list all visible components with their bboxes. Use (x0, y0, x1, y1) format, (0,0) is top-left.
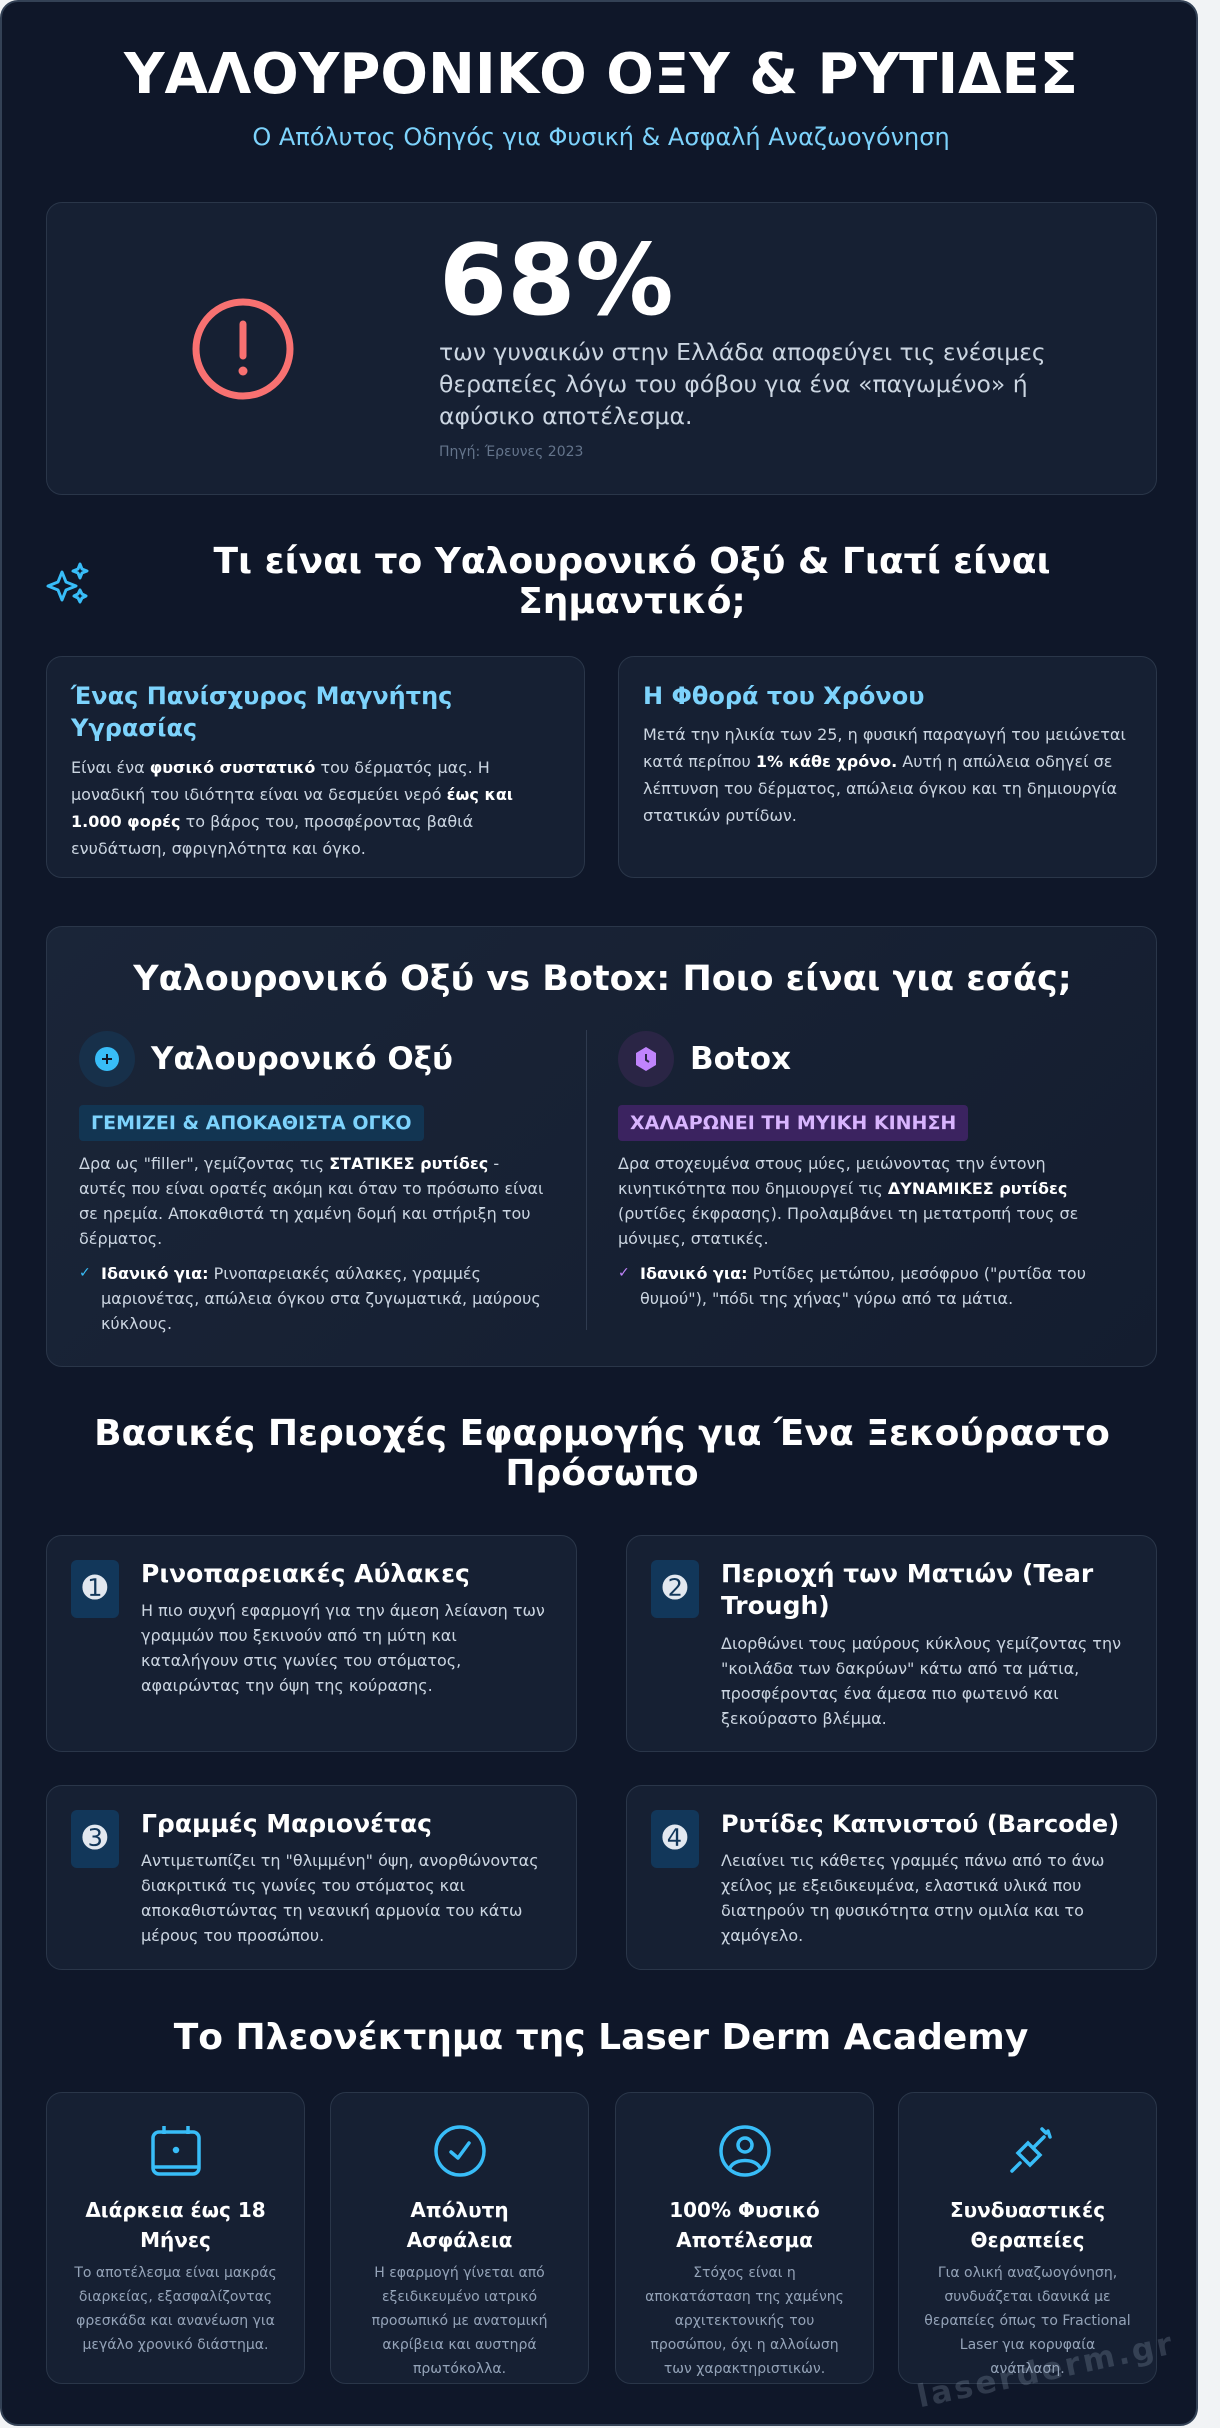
number badge (651, 1810, 699, 1868)
source: Πηγή: Έρευνες 2023 (439, 444, 583, 460)
area body: Αντιμετωπίζει τη "θλιμμένη" όψη, ανορθώνοντας διακριτικά τις γωνίες του στόματος και αποκαθιστώντας τη νεανική αρμονία του κάτω μέρους του προσώπου. (141, 1851, 539, 1945)
divider (586, 1030, 587, 1330)
area card 3 (46, 1785, 577, 1970)
column: HA (79, 1031, 543, 1333)
feature: natural (615, 2092, 874, 2384)
feature title: Θεραπείες (971, 2228, 1084, 2252)
comparison heading: Υαλουρονικό Οξύ vs Botox: Ποιο είναι για εσάς; (133, 959, 1072, 999)
feature title (669, 2198, 820, 2252)
area title: Γραμμές Μαριονέτας (141, 1809, 432, 1838)
card body: Μετά την ηλικία των 25, η φυσική παραγωγή του μειώνεται κατά περίπου 1% κάθε χρόνο. Αυτή η απώλεια οδηγεί σε λέπτυνση του δέρματος, απώλεια όγκου και τη δημιουργία στατικών ρυτίδων. (643, 725, 1126, 825)
feature: combined (898, 2092, 1157, 2384)
column: Botox (618, 1031, 1086, 1308)
tag (79, 1105, 424, 1141)
tag (618, 1105, 968, 1141)
feature title: Διάρκεια έως 18 Μήνες (85, 2198, 266, 2252)
area body: Λειαίνει τις κάθετες γραμμές πάνω από το άνω χείλος με εξειδικευμένα, ελαστικά υλικά που διατηρούν τη φυσικότητα στην ομιλία και το χαμόγελο. (721, 1851, 1104, 1945)
title: ΥΑΛΟΥΡΟΝΙΚΟ ΟΞΥ & ΡΥΤΙΔΕΣ (124, 42, 1078, 107)
number badge: ➊ (82, 1571, 108, 1606)
icon: calendar (151, 2126, 201, 2176)
area body: Η πιο συχνή εφαρμογή για την άμεση λείανση των γραμμών που ξεκινούν από τη μύτη και καταλήγουν στις γωνίες του στόματος, αφαιρώντας την όψη της κούρασης. (141, 1601, 545, 1695)
area card 1 (46, 1535, 577, 1752)
heading: what is HA: Τι είναι το Υαλουρονικό Οξύ & Γιατί είναι Σημαντικό; (214, 541, 1050, 622)
stat text: των γυναικών στην Ελλάδα αποφεύγει τις ενέσιμες θεραπείες λόγω του φόβου για ένα «παγωμένο» ή αφύσικο αποτέλεσμα. (439, 338, 1046, 430)
card title: Ένας Πανίσχυρος Μαγνήτης Υγρασίας (71, 682, 452, 742)
number badge: ➋ (662, 1571, 688, 1606)
area body: Διορθώνει τους μαύρους κύκλους γεμίζοντας την "κοιλάδα των δακρύων" κάτω από τα μάτια, προσφέροντας ένα άμεσα πιο φωτεινό και ξεκούραστο βλέμμα. (721, 1634, 1121, 1728)
number badge: ➌ (82, 1821, 108, 1856)
feature: duration (46, 2092, 305, 2384)
ideal for: ✓ (79, 1265, 91, 1281)
area title: Ρινοπαρειακές Αύλακες (141, 1559, 470, 1588)
feature title: Ασφάλεια (407, 2228, 512, 2252)
feature title (950, 2198, 1105, 2252)
number badge (651, 1560, 699, 1618)
number badge (71, 1810, 119, 1868)
icon: sparkles (46, 562, 88, 604)
area card 2 (626, 1535, 1157, 1752)
feature body: Το αποτέλεσμα είναι μακράς διαρκείας, εξασφαλίζοντας φρεσκάδα και ανανέωση για μεγάλο χρονικό διάστημα. (74, 2265, 277, 2353)
subtitle: Ο Απόλυτος Οδηγός για Φυσική & Ασφαλή Αναζωογόνηση (252, 123, 950, 151)
watermark: laserderm.gr (914, 2325, 1178, 2415)
feature title: 100% Φυσικό (669, 2198, 820, 2222)
stat number: 68% (439, 224, 674, 338)
ideal for: Ιδανικό για: Ρινοπαρειακές αύλακες, γραμμές μαριονέτας, απώλεια όγκου στα ζυγωματικά, μαύρους κύκλους. (101, 1264, 541, 1333)
feature title: Συνδυαστικές (950, 2198, 1105, 2222)
feature title: Απόλυτη (410, 2198, 509, 2222)
tag: ΓΕΜΙΖΕΙ & ΑΠΟΚΑΘΙΣΤΑ ΟΓΚΟ (91, 1112, 412, 1134)
icon: plus (79, 1031, 135, 1087)
column title: Botox (690, 1041, 791, 1077)
area card 4 (626, 1785, 1157, 1970)
icon: botox (618, 1031, 674, 1087)
icon: alert (192, 298, 294, 400)
icon: syringe (1010, 2127, 1052, 2173)
panel: HA vs Botox (46, 926, 1157, 1367)
description: Δρα στοχευμένα στους μύες, μειώνοντας την έντονη κινητικότητα που δημιουργεί τις ΔΥΝΑΜΙΚΕΣ ρυτίδες (ρυτίδες έκφρασης). Προλαμβάνει τη μετατροπή τους σε μόνιμες, στατικές. (618, 1154, 1078, 1248)
heading: advantage: Το Πλεονέκτημα της Laser Derm Academy (174, 2017, 1028, 2058)
number badge (71, 1560, 119, 1618)
icon: check circle (434, 2125, 486, 2177)
panel: time (618, 656, 1157, 878)
ideal for: ✓ (618, 1265, 630, 1281)
description: Δρα ως "filler", γεμίζοντας τις ΣΤΑΤΙΚΕΣ ρυτίδες - αυτές που είναι ορατές ακόμη και όταν το πρόσωπο είναι σε ηρεμία. Αποκαθιστά τη χαμένη δομή και στήριξη του δέρματος. (79, 1154, 543, 1248)
feature body: Στόχος είναι η αποκατάσταση της χαμένης αρχιτεκτονικής του προσώπου, όχι η αλλοίωση των χαρακτηριστικών. (645, 2265, 844, 2377)
tag: ΧΑΛΑΡΩΝΕΙ ΤΗ ΜΥΙΚΗ ΚΙΝΗΣΗ (630, 1112, 956, 1134)
feature title: Αποτέλεσμα (676, 2228, 813, 2252)
feature body: Η εφαρμογή γίνεται από εξειδικευμένο ιατρικό προσωπικό με ανατομική ακρίβεια και αυστηρά πρωτόκολλα. (372, 2265, 547, 2377)
panel: stat (46, 202, 1157, 495)
area title: Περιοχή των Ματιών (Tear Trough) (721, 1559, 1093, 1620)
feature title (406, 2198, 512, 2252)
heading: areas: Βασικές Περιοχές Εφαρμογής για Ένα Ξεκούραστο Πρόσωπο (94, 1413, 1110, 1494)
column title: Υαλουρονικό Οξύ (151, 1041, 453, 1077)
feature body: Για ολική αναζωογόνηση, συνδυάζεται ιδανικά με θεραπείες όπως το Fractional Laser για κορυφαία ανάπλαση. (924, 2265, 1131, 2377)
number badge: ➍ (662, 1821, 688, 1856)
area title: Ρυτίδες Καπνιστού (Barcode) (721, 1810, 1119, 1838)
icon: user (719, 2125, 771, 2177)
card body: Είναι ένα φυσικό συστατικό του δέρματός μας. Η μοναδική του ιδιότητα είναι να δεσμεύει νερό έως και 1.000 φορές το βάρος του, προσφέροντας βαθιά ενυδάτωση, σφριγηλότητα και όγκο. (71, 758, 513, 858)
feature: safety (330, 2092, 589, 2384)
ideal for: Ιδανικό για: Ρυτίδες μετώπου, μεσόφρυο ("ρυτίδα του θυμού"), "πόδι της χήνας" γύρω από τα μάτια. (640, 1264, 1086, 1308)
panel: magnet (46, 656, 585, 878)
card title: Η Φθορά του Χρόνου (643, 682, 924, 710)
